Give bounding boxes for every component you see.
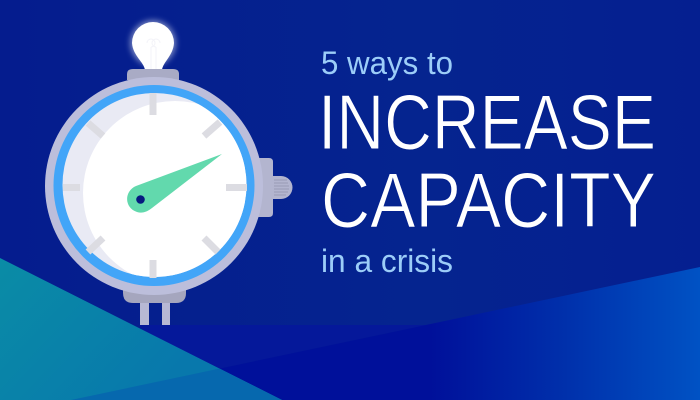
bottom legs — [140, 300, 170, 325]
stopwatch illustration — [45, 20, 292, 325]
watch case — [45, 77, 263, 295]
text: 5 ways to: 5 ways to — [321, 45, 453, 81]
text: in a crisis: in a crisis — [321, 243, 453, 279]
blue ring — [54, 85, 254, 286]
watch face — [62, 93, 246, 277]
bottom lug — [123, 285, 186, 303]
top crown — [127, 69, 179, 80]
side button — [255, 158, 292, 217]
tick marks — [63, 93, 247, 278]
icon: light bulb — [130, 20, 176, 70]
text: CAPACITY: CAPACITY — [321, 156, 656, 244]
heading text — [318, 45, 656, 279]
teal corner shape — [0, 258, 282, 400]
needle — [127, 154, 222, 213]
